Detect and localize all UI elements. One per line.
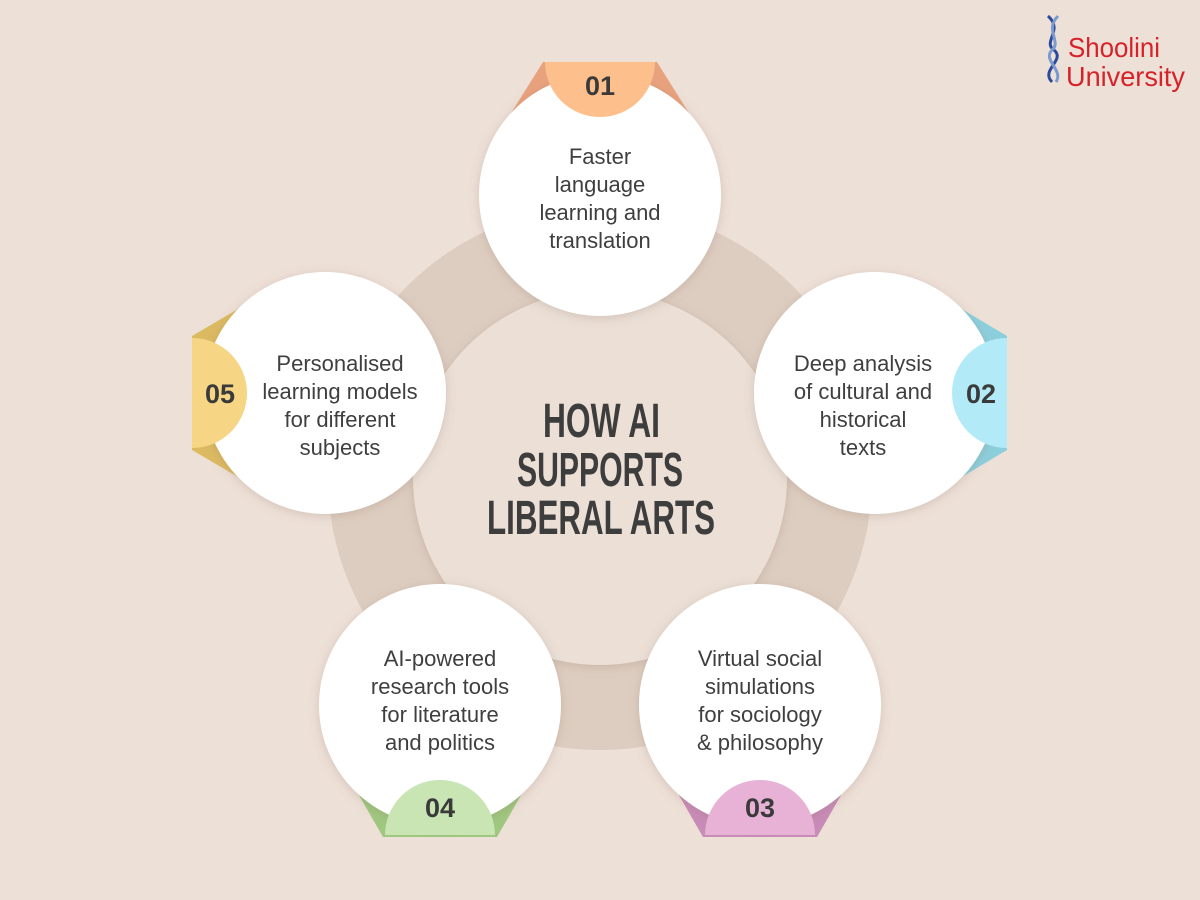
item 03	[639, 584, 881, 837]
item 05	[192, 272, 446, 514]
logo	[1048, 16, 1185, 92]
text 01: language	[555, 172, 645, 197]
text 05: for different	[285, 407, 395, 432]
text 04: for literature	[381, 702, 499, 727]
badge 01: 01	[585, 71, 615, 101]
badge 05	[192, 338, 247, 448]
text 05: learning models	[262, 379, 418, 404]
text 01: learning and	[539, 200, 661, 225]
title: HOW AI	[543, 395, 660, 448]
badge 05: 05	[205, 379, 235, 409]
badge 02	[952, 338, 1007, 448]
item 01	[479, 62, 721, 316]
text 04: AI-powered	[384, 646, 496, 671]
text 04: research tools	[371, 674, 509, 699]
badge 02: 02	[966, 379, 996, 409]
badge 04	[385, 780, 495, 835]
text 05: Personalised	[276, 351, 404, 376]
text 02: of cultural and	[794, 379, 932, 404]
text 03: Virtual social	[698, 646, 822, 671]
badge 04: 04	[425, 793, 455, 823]
center circle	[413, 291, 787, 665]
badge 03: 03	[745, 793, 775, 823]
title	[487, 395, 715, 545]
text 03: simulations	[705, 674, 815, 699]
logo: University	[1066, 61, 1185, 92]
logo: Shoolini	[1068, 32, 1160, 63]
icon: dna helix	[1048, 16, 1058, 82]
badge 03	[705, 780, 815, 835]
text 05: subjects	[300, 435, 380, 460]
item 02	[754, 272, 1007, 514]
text 04: and politics	[385, 730, 495, 755]
text 02: historical	[820, 407, 906, 432]
text 03: for sociology	[698, 702, 822, 727]
title: SUPPORTS	[517, 444, 683, 497]
ring connector	[328, 206, 872, 750]
title: LIBERAL ARTS	[487, 492, 715, 545]
text 02: Deep analysis	[794, 351, 932, 376]
text 01: Faster	[569, 144, 631, 169]
item 04	[319, 584, 561, 837]
badge 01	[545, 62, 655, 117]
text 02: texts	[840, 435, 886, 460]
text 01: translation	[549, 228, 651, 253]
text 03: & philosophy	[697, 730, 823, 755]
